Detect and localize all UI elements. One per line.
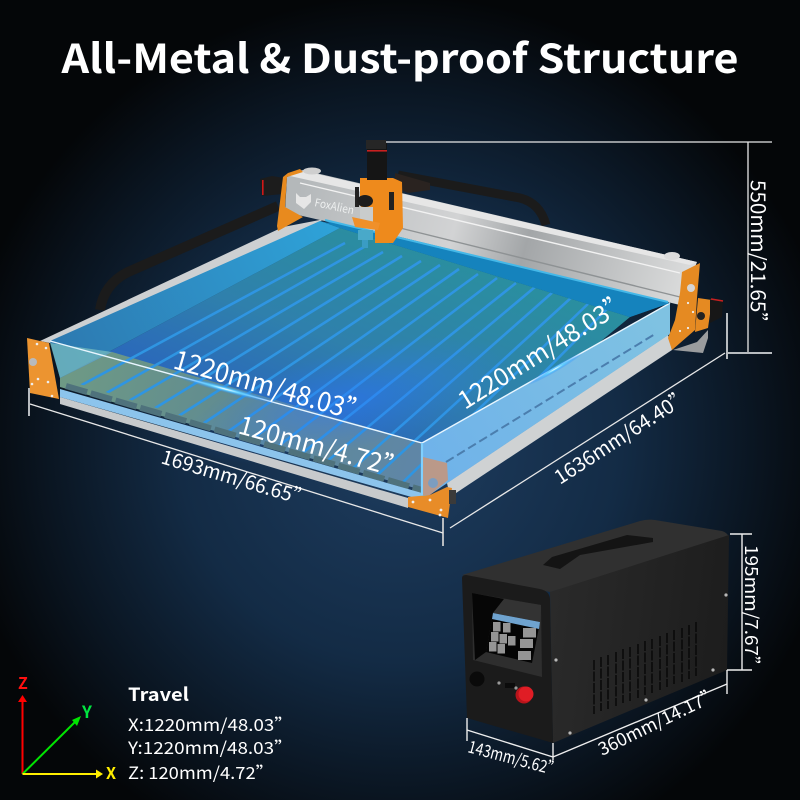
gantry left plate — [277, 169, 303, 231]
Z label: Z — [18, 670, 28, 694]
rotary knob — [470, 672, 484, 686]
label: right depth inside bed: 1220mm/48.03” — [450, 281, 637, 417]
z motor cap — [366, 140, 386, 149]
CNC machine — [27, 140, 723, 518]
handle — [543, 535, 653, 569]
label: overall depth: 1636mm/64.40” — [547, 380, 696, 490]
right end bracket — [673, 330, 708, 353]
side vent slots — [594, 622, 696, 714]
control box — [462, 520, 729, 743]
z motor — [367, 143, 387, 180]
left side rail — [40, 219, 325, 343]
label: box length: 360mm/14.17” — [593, 680, 724, 761]
travel X: X:1220mm/48.03” — [128, 711, 293, 736]
rear chain bracket — [395, 173, 430, 193]
box front — [462, 575, 553, 743]
bed slats — [60, 228, 630, 493]
touch screen — [486, 613, 540, 663]
front rail — [60, 397, 408, 508]
travel block — [127, 681, 293, 784]
right side rail — [447, 335, 672, 497]
back wall over beam base — [325, 221, 670, 317]
X label: X — [106, 760, 116, 784]
glass edges — [50, 303, 670, 498]
spindle carriage — [352, 140, 430, 248]
travel heading: Travel — [128, 681, 189, 707]
side screws — [554, 593, 728, 735]
left stepper motor — [260, 176, 284, 196]
dimension lines: control box — [467, 534, 752, 760]
box side — [550, 535, 729, 743]
brand logo: FoxAlien — [313, 194, 356, 218]
title: All-Metal & Dust-proof Structure — [60, 27, 738, 85]
X axis arrow — [22, 770, 103, 778]
glass: left wall — [50, 221, 340, 378]
emergency stop button — [516, 686, 534, 704]
label: box width: 143mm/5.62” — [466, 733, 564, 781]
front-left orange plate — [27, 338, 59, 399]
screen recess — [472, 593, 542, 677]
Y axis arrow — [22, 716, 81, 774]
axis diagram — [18, 670, 116, 784]
light strip under slats — [60, 389, 422, 500]
label: front width inside bed: 1220mm/48.03” — [170, 338, 375, 431]
box top — [462, 520, 729, 592]
slat front faces — [66, 386, 422, 490]
Y label: Y — [81, 698, 92, 723]
gantry right plate — [668, 263, 700, 350]
gantry beam — [285, 168, 697, 305]
switches — [497, 681, 518, 690]
blue haze on bed — [173, 310, 527, 490]
glass: back wall — [320, 221, 670, 317]
label: overall width: 1693mm/66.65” — [158, 441, 315, 513]
right drag chain — [398, 175, 546, 225]
spindle — [360, 207, 373, 223]
label: box height: 195mm/7.67” — [739, 545, 765, 675]
brand logo — [296, 193, 356, 218]
glass: left end — [50, 343, 112, 378]
label: overall height: 550mm/21.65” — [745, 180, 774, 333]
edge glow highlights — [171, 350, 584, 407]
front-right orange plate — [408, 457, 456, 518]
glass: right wall — [422, 303, 670, 500]
travel Y: Y:1220mm/48.03” — [127, 734, 293, 759]
label: Z travel height: 120mm/4.72” — [235, 405, 411, 487]
Z axis arrow — [18, 695, 27, 774]
right stepper motor — [695, 298, 723, 332]
orange z plate — [360, 178, 403, 243]
travel Z: Z: 120mm/4.72” — [128, 759, 274, 784]
dimension lines: machine — [29, 142, 772, 546]
left drag chain — [100, 206, 278, 310]
